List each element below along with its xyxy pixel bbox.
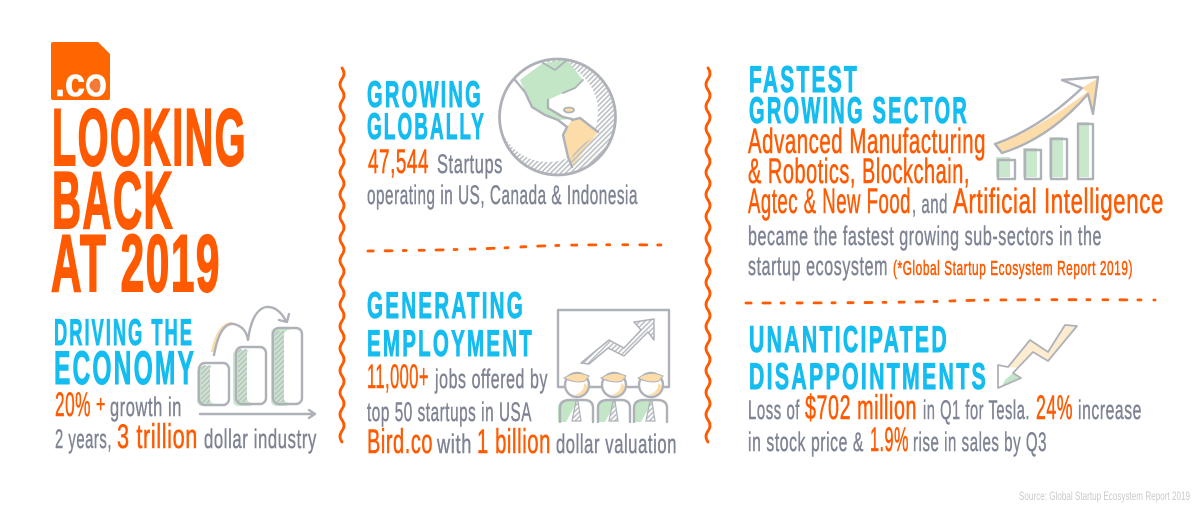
text: jobs: with (436, 429, 472, 459)
text: jobs: dollar valuation (556, 429, 677, 459)
icon: presentation board with audience (558, 310, 669, 422)
text: jobs: 11,000+ (367, 358, 429, 396)
text: sectors (748, 122, 1164, 281)
text: growth: 2 years, (55, 424, 112, 454)
title (51, 93, 247, 309)
icon: globe (498, 59, 616, 175)
text: tesla: 1.9% (870, 421, 909, 459)
text: tesla: Loss of (748, 395, 800, 425)
heading: growing globally: GLOBALLY (367, 106, 486, 147)
text: tesla (748, 389, 1142, 459)
heading: generating employment: GENERATING (367, 285, 525, 326)
icon: rising bars with arrows (197, 307, 315, 418)
title: BACK (52, 156, 174, 246)
heading: driving the economy: ECONOMY (54, 341, 196, 394)
text: tesla: rise in sales by Q3 (913, 427, 1047, 457)
logo: .co: .co (55, 61, 107, 105)
divider: middle dashed line (368, 245, 665, 251)
text: tesla: increase (1078, 395, 1142, 425)
heading: driving the economy (54, 312, 196, 394)
divider: right wavy line (706, 68, 710, 442)
text: sectors: , and (912, 189, 948, 219)
panel: driving the economy (54, 307, 317, 456)
text: growth: 20% (55, 386, 91, 424)
heading: unanticipated disappointments (749, 319, 988, 397)
heading: unanticipated disappointments: DISAPPOINTMENTS (749, 356, 988, 397)
text: LOOKING (52, 93, 247, 183)
divider: left wavy line (340, 68, 344, 442)
heading: fastest growing sector (749, 59, 969, 131)
icon: falling arrow (998, 325, 1077, 388)
text: jobs: Bird.co (367, 423, 433, 461)
heading: fastest growing sector: FASTEST (749, 59, 859, 100)
text: startups: Startups (437, 149, 503, 179)
text: jobs: top 50 startups in USA (367, 397, 532, 427)
heading: growing globally (367, 74, 486, 147)
title: AT 2019 (51, 219, 221, 309)
icon: bars with rising arrow (995, 77, 1098, 179)
text: tesla: in stock price & (748, 427, 864, 457)
text: sectors: Agtec & New Food (748, 182, 911, 221)
text: growth (55, 386, 317, 456)
text: growth: 3 trillion (117, 418, 198, 456)
divider: right dashed line (746, 300, 1155, 303)
text: tesla: in Q1 for Tesla. (923, 395, 1030, 425)
panel: unanticipated disappointments (748, 319, 1142, 459)
logo: .co (51, 42, 110, 105)
heading: generating employment (367, 285, 534, 364)
text: growth: dollar industry (204, 424, 317, 454)
text: tesla: 24% (1036, 389, 1073, 427)
heading: fastest growing sector: GROWING SECTOR (749, 90, 969, 131)
text: sectors: & Robotics, Blockchain, (748, 152, 970, 191)
heading: growing globally: GROWING (367, 74, 483, 115)
text: jobs: jobs offered by (434, 364, 548, 394)
text: startups: 47,544 (368, 143, 429, 181)
text: jobs: 1 billion (477, 423, 551, 461)
text: sectors: startup ecosystem (748, 251, 888, 281)
text: startups: operating in US, Canada & Indonesia (367, 180, 638, 210)
heading: unanticipated disappointments: UNANTICIPATED (749, 319, 949, 360)
panel: growing globally (367, 59, 638, 210)
text: sectors: Advanced Manufacturing (748, 122, 986, 161)
text: startups (367, 143, 638, 210)
text: growth: growth in (110, 392, 182, 422)
text: tesla: $702 million (805, 389, 917, 427)
panel: fastest growing sector (748, 59, 1164, 281)
heading: generating employment: EMPLOYMENT (367, 323, 534, 364)
text: growth: + (96, 391, 106, 418)
text: jobs (367, 358, 677, 461)
panel: generating employment (367, 285, 677, 461)
heading: driving the economy: DRIVING THE (54, 312, 194, 353)
